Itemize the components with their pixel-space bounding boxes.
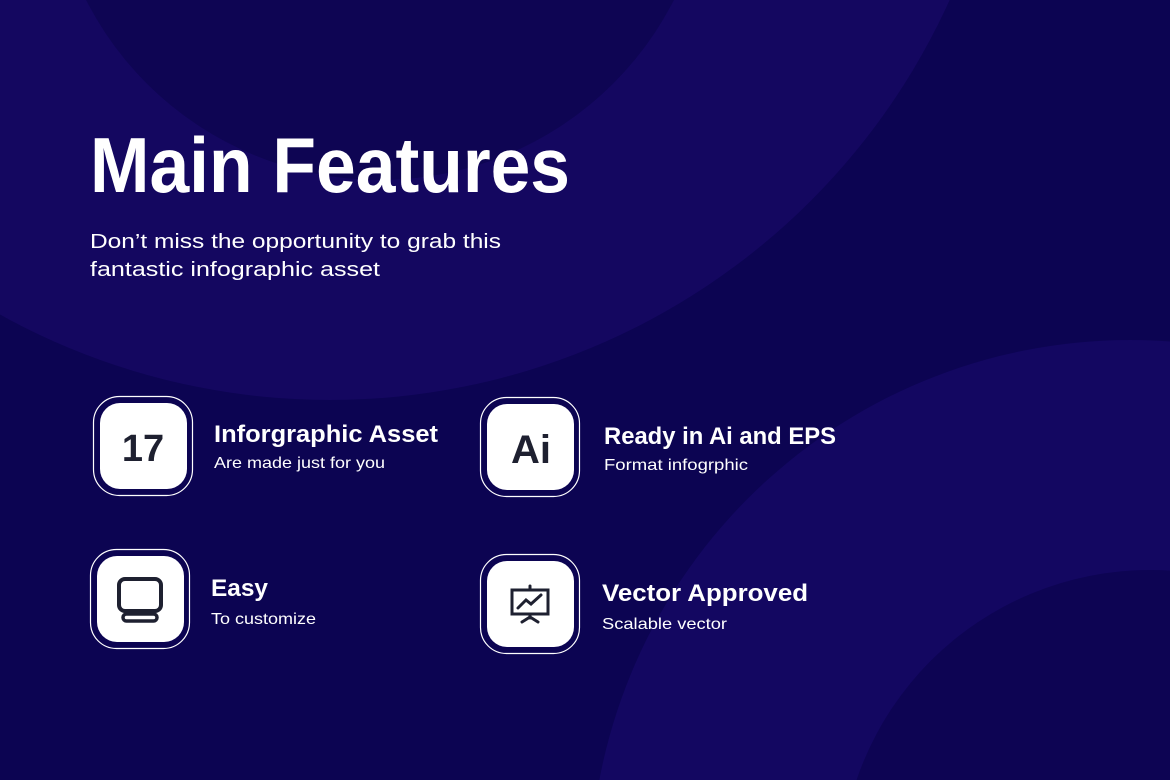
title: Main Features (90, 121, 570, 209)
feature: vector: Scalable vector (602, 616, 728, 633)
icon: presentation chart (480, 554, 580, 654)
feature: Ai (480, 398, 836, 496)
subtitle: Don’t miss the opportunity to grab this (90, 231, 501, 253)
subtitle: fantastic infographic asset (90, 259, 381, 281)
icon: 17 (94, 396, 192, 496)
icon: Ai (480, 398, 580, 496)
feature: Ai: Ready in Ai and EPS (604, 423, 836, 450)
feature: 17 infographic asset (94, 396, 438, 496)
icon: Ai: Ai (511, 428, 551, 472)
icon: monitor (90, 550, 190, 648)
feature: easy (90, 550, 316, 648)
feature: 17 infographic asset: Are made just for you (214, 455, 385, 472)
subtitle (90, 231, 501, 281)
feature: 17 infographic asset: Inforgraphic Asset (214, 421, 438, 448)
feature: easy: To customize (211, 611, 316, 628)
feature: Ai: Format infogrphic (604, 457, 748, 474)
icon: 17: 17 (122, 428, 164, 470)
feature: vector (480, 554, 808, 654)
feature: easy: Easy (211, 575, 269, 602)
feature: vector: Vector Approved (602, 580, 808, 607)
